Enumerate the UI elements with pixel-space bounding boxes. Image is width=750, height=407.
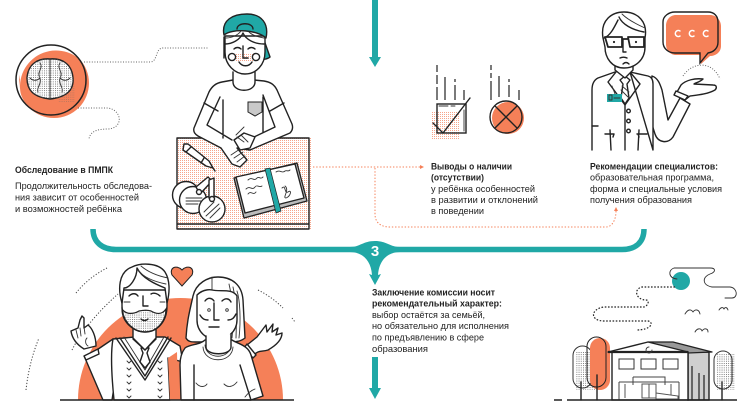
icon: falling checkmark <box>432 65 470 140</box>
cap <box>224 14 267 38</box>
text block: commission conclusion: Заключение комиссии носит <box>372 288 495 298</box>
icon: falling cross <box>490 65 524 134</box>
text block: examination duration: ния зависит от особенностей <box>15 192 139 204</box>
roof back <box>648 342 712 353</box>
illustration: table with items <box>172 138 312 230</box>
text block: examination duration: Продолжительность обследова- <box>15 181 152 192</box>
arrow: lower teal arrow <box>369 357 381 399</box>
text block: conclusions: (отсутствии) <box>431 172 484 184</box>
icon: birds <box>685 308 728 332</box>
man hair <box>120 264 169 303</box>
text block: recommendations <box>590 162 722 206</box>
text block: conclusions <box>431 162 538 217</box>
hands <box>231 127 255 162</box>
text block: recommendations: получения образования <box>590 195 692 206</box>
icon: speech bubble <box>663 12 721 64</box>
dotted link: brain to caption <box>78 108 119 139</box>
neck <box>615 60 633 78</box>
text block: examination duration <box>15 181 152 215</box>
arrow: top teal arrow <box>369 0 381 67</box>
illustration: boy in cap <box>194 14 293 167</box>
icon: pen <box>183 144 215 171</box>
text block: commission conclusion: выбор остаётся за семьёй, <box>372 310 485 321</box>
illustration: doctor <box>592 12 716 150</box>
woman body <box>180 340 263 400</box>
tree: dotted left <box>573 346 596 400</box>
text block: commission conclusion: но обязательно для исполнения <box>372 321 509 332</box>
ground line <box>554 399 737 401</box>
head <box>225 36 265 74</box>
man head <box>122 290 167 332</box>
face <box>236 53 253 62</box>
windows <box>619 359 634 369</box>
step number: 3 <box>371 243 379 260</box>
hair and head <box>603 12 646 68</box>
text block: commission conclusion: рекомендательный характер: <box>372 298 502 310</box>
heading: examination: Обследование в ПМПК <box>15 165 113 176</box>
jacket <box>592 72 653 150</box>
woman right hand <box>244 324 282 358</box>
dotted arc above doctor hand <box>683 65 720 79</box>
text block: examination duration: и возможностей ребёнка <box>15 204 123 215</box>
glasses <box>605 37 644 47</box>
dotted arcs <box>26 268 295 390</box>
text block: recommendations: форма и специальные условия <box>590 184 722 195</box>
table line <box>60 399 294 401</box>
text block: commission conclusion: по предъявлению в сфере <box>372 332 484 344</box>
text block: commission conclusion: образования <box>372 344 428 355</box>
woman hair <box>186 277 245 342</box>
illustration: parents <box>26 264 295 400</box>
icon: glasses <box>172 177 225 222</box>
text block: conclusions: в развитии и отклонений <box>431 195 538 206</box>
building body <box>612 352 688 400</box>
face <box>620 40 629 64</box>
text block: recommendations: Рекомендации специалистов: <box>590 162 718 172</box>
hair <box>224 33 264 58</box>
tree: orange <box>587 337 610 400</box>
dotted arrow: table to conclusions <box>313 165 424 169</box>
text block: conclusions: Выводы о наличии <box>431 162 512 172</box>
illustration: school building <box>554 337 737 400</box>
icon: sun with clouds line <box>594 268 736 330</box>
arm <box>648 76 690 142</box>
teal bracket with step number 3 <box>93 229 644 285</box>
entrance <box>619 377 679 400</box>
text block: conclusions: в поведении <box>431 206 484 217</box>
text block: conclusions: у ребёнка особенностей <box>431 184 535 195</box>
badge <box>607 94 622 102</box>
icon: heart <box>171 267 193 286</box>
dotted arrow: table to recommendations <box>375 168 618 227</box>
dotted link: brain to boy <box>84 48 208 62</box>
icon: open book <box>234 163 307 218</box>
icon: brain in circle <box>16 44 89 118</box>
orange semicircle <box>78 298 283 400</box>
woman face <box>197 290 237 340</box>
hand <box>677 79 716 100</box>
tree: dotted right <box>714 351 735 400</box>
text block: commission conclusion <box>372 288 509 355</box>
building side <box>688 352 709 400</box>
cap back <box>258 40 270 60</box>
man neck <box>133 325 156 350</box>
pocket <box>248 102 262 116</box>
man raised arm <box>71 316 120 400</box>
man torso <box>111 337 183 400</box>
text block: recommendations: образовательная программа, <box>590 172 714 184</box>
body and arms <box>194 80 293 167</box>
